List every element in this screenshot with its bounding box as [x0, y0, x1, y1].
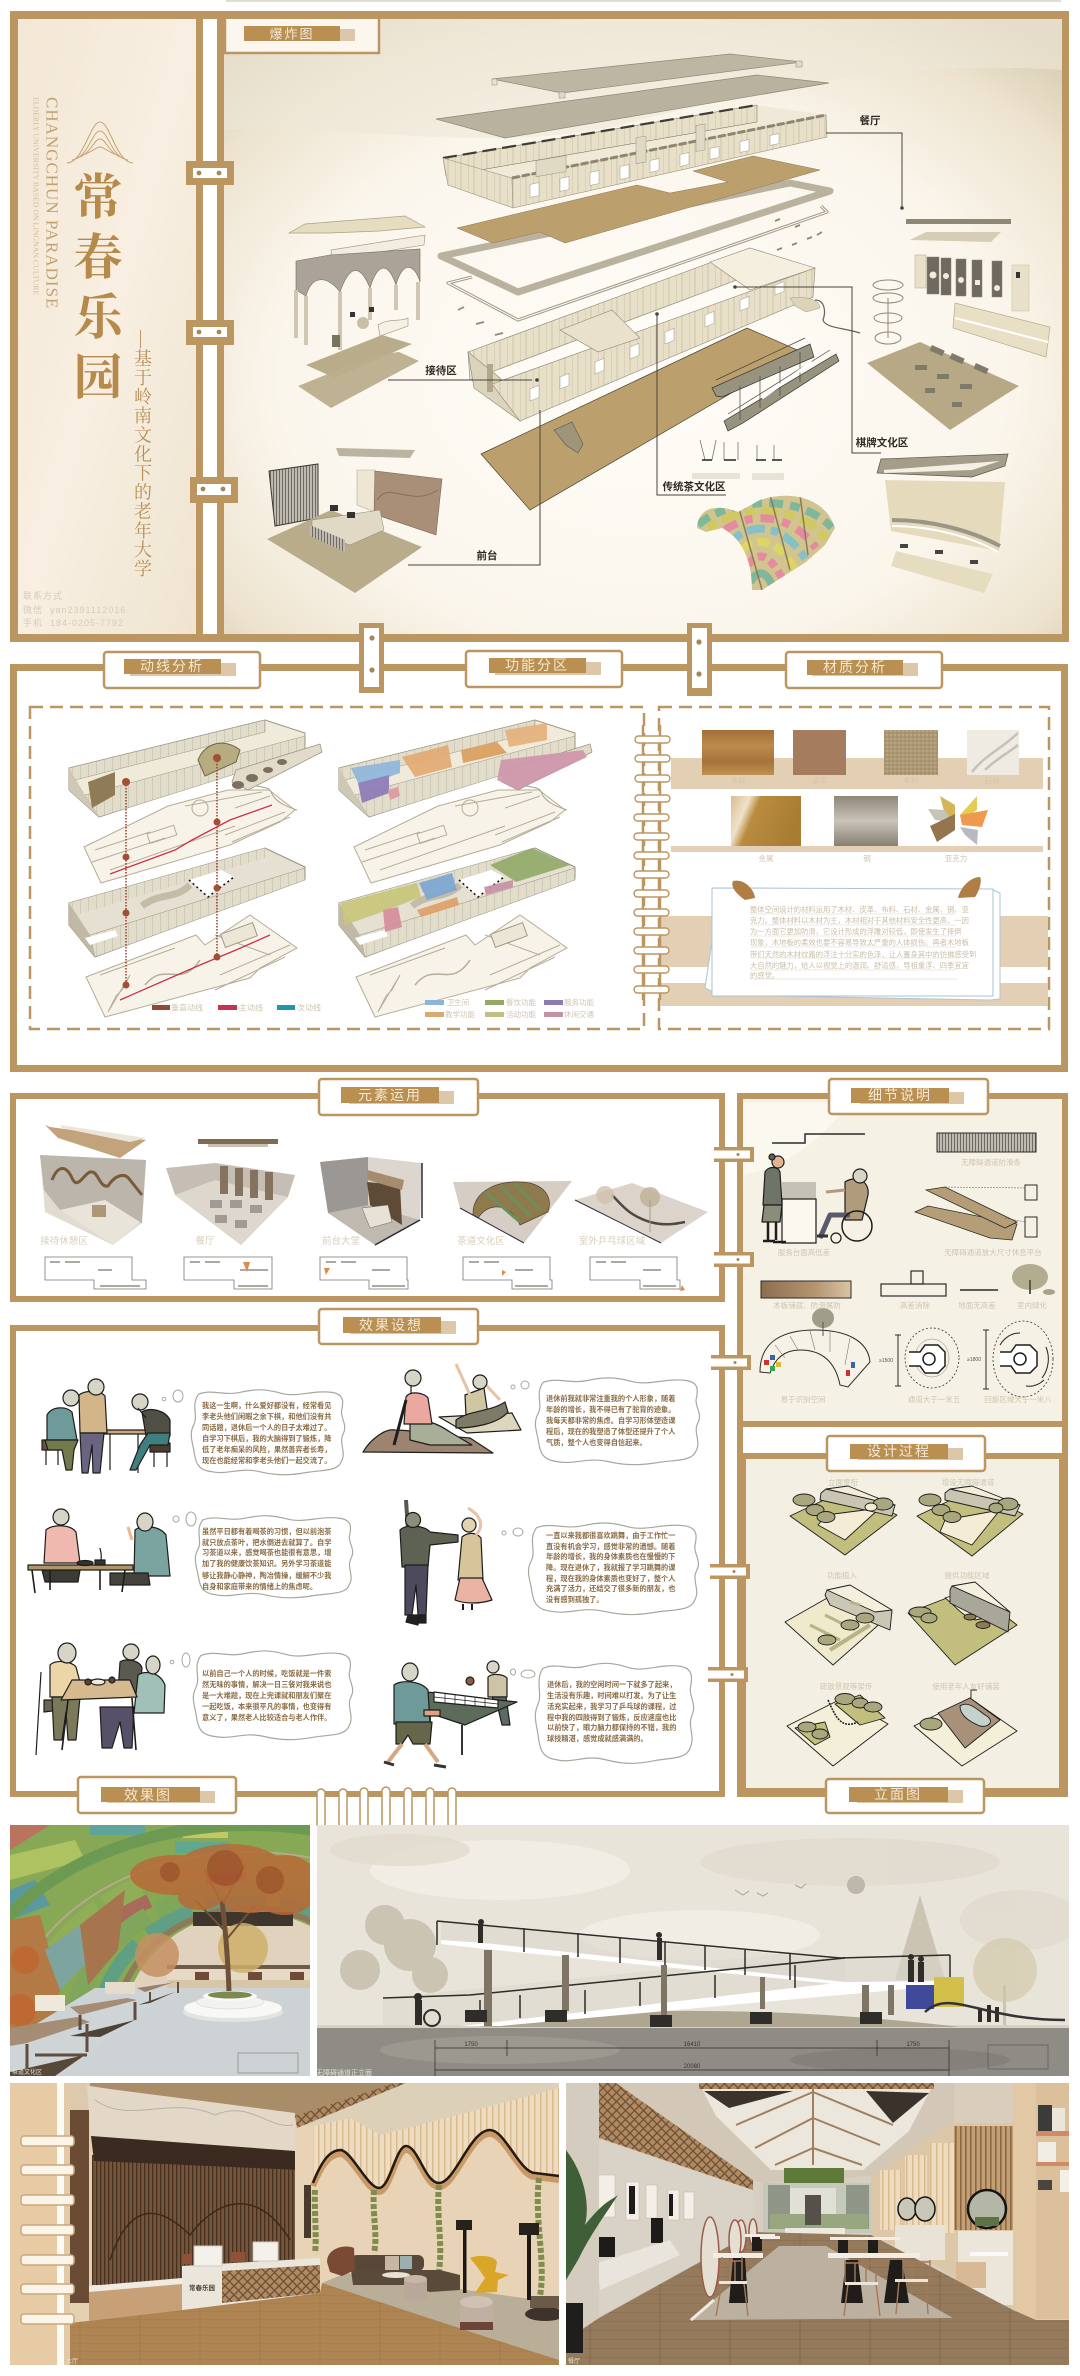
back window	[763, 2183, 871, 2233]
bubble 6: 退休后，我的空闲时间一下就多了起来，	[547, 1680, 676, 1689]
ceiling	[64, 2083, 399, 2118]
left wall	[734, 2184, 753, 2190]
floor	[566, 2232, 1069, 2365]
note paper with description: 的感觉。	[750, 971, 779, 980]
panel: exploded view and title	[10, 11, 1069, 642]
lower walls	[468, 248, 815, 421]
bubble 3: 自身和家庭带来的情绪上的焦虑呢。	[202, 1582, 317, 1591]
tab: 立面图	[826, 1779, 984, 1813]
tab: 元素运用	[319, 1079, 478, 1115]
bubble 5: 一起吃饭，本来很平凡的事情，也变得有	[202, 1702, 331, 1711]
callouts with leader lines: 传统茶文化区	[662, 480, 726, 493]
side clips joining panels	[708, 1147, 754, 1682]
soft ink wash	[224, 19, 1062, 138]
big tan floor	[481, 328, 802, 510]
bubble 4: 年龄的增长，我的身体素质也在慢慢的下	[546, 1552, 675, 1561]
callouts with leader lines	[388, 114, 909, 565]
process captions: 使用老年人友好铺装	[932, 1681, 1000, 1691]
ramps	[580, 1936, 944, 1980]
detail captions: 易于识别空间	[780, 1394, 826, 1404]
note paper with description: 为一方面它更加防滑，它设计形成的浮雕对较低，即使发生了摔倒	[750, 927, 962, 936]
background trees	[340, 1895, 1037, 2025]
render: ramp elevation: 20080	[684, 2064, 701, 2070]
material swatches: 布料	[904, 775, 919, 785]
detail: arch	[760, 1308, 870, 1387]
silhouettes	[414, 1919, 999, 2027]
room labels: 餐厅	[195, 1235, 215, 1247]
render: arch atrium	[10, 1825, 310, 2076]
note paper with description	[705, 877, 1000, 1000]
callouts with leader lines: 接待区	[425, 364, 457, 377]
arch ribs	[10, 1825, 310, 1988]
tab: 效果图: 效果图	[124, 1787, 172, 1803]
ramp	[712, 338, 839, 431]
top sliver	[226, 0, 1061, 2]
room model: tea arch	[453, 1181, 572, 1243]
panel: design process	[740, 1424, 1065, 1794]
contact details: 微信	[23, 604, 43, 615]
render: restaurant	[566, 2083, 1069, 2365]
bubble 2: 程后，现在的我塑造了体型还提升了个人	[546, 1427, 676, 1436]
floor plate tan	[457, 156, 820, 243]
mini key plans	[45, 1257, 685, 1291]
bubble 1: 低了老年痴呆的风险，果然善弈者长寿，	[202, 1445, 331, 1454]
panel: effect ideas	[13, 1328, 722, 1794]
process model 2	[917, 1486, 1023, 1556]
spine clips	[186, 161, 238, 503]
bubble 3: 加了我的健康饮茶知识。另外学习茶道能	[202, 1559, 332, 1568]
function legend: 休闲交通	[564, 1009, 594, 1019]
bubble 1: 李老头他们闲暇之余下棋，和他们没有共	[202, 1412, 331, 1421]
detail captions: 无障碍通道防滑条	[961, 1157, 1021, 1167]
module: restaurant	[867, 219, 1050, 430]
arch under band	[313, 2134, 559, 2192]
bubble 3: 够让我静心静神，陶冶情操，缓解不少我	[202, 1571, 332, 1580]
circulation legend	[152, 1002, 321, 1012]
main tree	[130, 1844, 320, 1992]
detail: tree	[1012, 1264, 1055, 1295]
circulation legend: 垂直动线	[171, 1002, 203, 1012]
lattice beam	[295, 2083, 406, 2128]
bubble 4: 没有感到孤独了。	[546, 1595, 604, 1604]
vertical pills binding	[317, 1787, 456, 1828]
detail: wood bar	[761, 1281, 851, 1298]
stairs	[554, 422, 583, 453]
panel: analysis frame	[14, 668, 1064, 1068]
ring beam	[441, 183, 830, 292]
tab: 设计过程: 设计过程	[867, 1443, 931, 1459]
detail captions: 地面无高差	[958, 1300, 996, 1310]
tab: 细节说明	[829, 1079, 988, 1114]
detail captions: 通道大于一米五	[908, 1394, 961, 1404]
tile roof	[91, 2136, 301, 2170]
room labels: 前台大堂	[322, 1235, 360, 1247]
detail: counter heights	[762, 1134, 872, 1243]
process model 5	[787, 1694, 888, 1766]
booths	[958, 2231, 1013, 2305]
process captions: 立面贯衔	[828, 1477, 858, 1487]
bubble 4: 一直以来我都很喜欢跳舞，由于工作忙一	[546, 1531, 675, 1540]
dark column	[70, 2110, 89, 2303]
function zoning axonometric	[339, 720, 592, 1017]
sofa and stools	[327, 2247, 565, 2330]
detail captions: 回旋区域大于一米八	[984, 1394, 1052, 1404]
detail: turning circle 1500	[879, 1328, 959, 1388]
bubble 3: 习茶道以来，感觉喝茶也能很有意思，增	[202, 1548, 331, 1557]
detail captions: 室内绿化	[1017, 1300, 1047, 1310]
function legend: 卫生间	[447, 997, 469, 1007]
module: chess culture area	[877, 454, 1008, 593]
process model 6	[914, 1690, 1017, 1766]
vertical circulation dotted	[122, 754, 221, 988]
render: ramp elevation: 1750	[906, 2042, 920, 2048]
room model: ping pong area	[575, 1183, 708, 1243]
vines	[315, 2178, 542, 2296]
room labels: 茶道文化区	[457, 1235, 505, 1247]
detail captions: 高差消除	[900, 1300, 930, 1310]
process captions: 增设无障碍通道	[942, 1477, 995, 1487]
tab: 功能分区: 功能分区	[505, 657, 569, 673]
wavy ground and pool	[815, 300, 860, 333]
bubble 3: 虽然平日都有着喝茶的习惯，但以前泡茶	[202, 1527, 332, 1536]
tab: 功能分区	[466, 651, 622, 687]
bubble 1: 我这一生啊，什么爱好都没有，经常看见	[202, 1401, 331, 1410]
material swatches: 金属	[758, 853, 774, 863]
vertical clips across frames	[359, 623, 712, 696]
panel: element application	[13, 1096, 722, 1299]
main circulation routes	[110, 805, 272, 1000]
material swatches: 钢	[863, 853, 871, 863]
note paper with description: 大自然的魅力，给人以视觉上的温润、舒适感，导祖重浮、四季宜宜	[750, 961, 969, 970]
note paper with description: 现象，木地板的柔效也要不容易导致太严重的人体损伤。再者木地板	[750, 938, 970, 947]
contact details: 联系方式	[23, 590, 63, 601]
dining tables and chairs	[729, 2235, 909, 2303]
module: colourful arch tea area	[690, 440, 840, 595]
detail captions	[773, 1157, 1052, 1404]
lattice strip left	[599, 2083, 753, 2190]
slat wall	[92, 2155, 297, 2285]
material swatches	[702, 730, 1019, 863]
room model: front desk	[320, 1157, 422, 1245]
module: front desk	[267, 448, 442, 593]
bubble 1: 同话题，退休后一个人的日子太难过了。	[202, 1423, 331, 1432]
bubble 5: 然无味的事情，解决一日三餐对我来说也	[202, 1680, 331, 1689]
roof plate	[492, 54, 802, 98]
render: ramp elevation: 1750	[464, 2042, 478, 2048]
callouts with leader lines: 前台	[476, 549, 498, 562]
process model 4	[908, 1582, 1017, 1665]
image captions: 茶道文化区	[12, 2068, 42, 2076]
material swatches: 皮革	[812, 775, 828, 785]
process captions: 疏散景观等架传	[820, 1681, 873, 1691]
material swatches: 石材	[984, 775, 1000, 785]
process captions	[820, 1477, 1000, 1691]
subtitle vertical: —基于岭南文化下的老年大学	[132, 329, 152, 578]
bubble 4: 充满了活力，还结交了很多新的朋友，也	[546, 1584, 675, 1593]
process captions: 功能植入	[827, 1570, 857, 1580]
reception desk: 常春乐园	[189, 2283, 216, 2292]
process model 1	[790, 1486, 897, 1555]
tab: 材质分析: 材质分析	[823, 659, 887, 675]
english title vertical	[32, 97, 62, 309]
process model 3	[785, 1585, 892, 1665]
tab: 元素运用: 元素运用	[358, 1087, 422, 1103]
bubble 4: 降。现在退休了，我就报了学习跳舞的课	[546, 1563, 676, 1572]
far left column and plant	[597, 2174, 599, 2280]
ceiling plate	[436, 75, 829, 138]
circulation analysis axonometric	[69, 720, 322, 1017]
bubble 6: 生活没有乐趣，时间难以打发。为了让生	[547, 1691, 676, 1700]
panel: detail notes	[740, 1096, 1065, 1424]
function legend	[425, 997, 594, 1019]
callouts with leader lines: 餐厅	[860, 114, 881, 127]
bubble 3: 就只放点茶叶，把水倒进去就算了。自学	[202, 1538, 331, 1547]
room labels: 室外乒乓球区域	[579, 1235, 646, 1247]
bubble 2: 我每天都非常的焦虑。自学习形体塑造课	[546, 1416, 676, 1425]
arched glass partitions	[701, 2217, 757, 2297]
tab: 材质分析	[786, 652, 942, 688]
material swatches: 亚克力	[945, 853, 967, 863]
dimension lines	[435, 2040, 949, 2076]
function legend: 教学功能	[445, 1009, 475, 1019]
bubble 5	[170, 1651, 353, 1740]
callouts with leader lines: 棋牌文化区	[856, 436, 909, 449]
render: lobby	[10, 2083, 565, 2365]
bubble 6	[510, 1663, 694, 1763]
contact details: 手机	[23, 617, 43, 628]
detail: strip bar	[937, 1133, 1036, 1152]
right wall and slats	[871, 2120, 1013, 2310]
bubble 2	[511, 1378, 700, 1465]
function legend: 餐饮功能	[506, 997, 536, 1007]
detail: turning circle 1800: ≥1800	[967, 1357, 981, 1363]
render: ramp elevation: 16410	[684, 2042, 701, 2048]
marble back wall	[87, 2086, 295, 2152]
tab: 细节说明: 细节说明	[868, 1087, 932, 1103]
detail captions: 木板铺就、防滑属防	[773, 1300, 841, 1310]
title logo: mountain lines	[67, 122, 133, 163]
scene: dance	[400, 1500, 492, 1625]
function legend: 活动功能	[506, 1009, 536, 1019]
bubble 2: 退休前我就非常注重我的个人形象，随着	[546, 1394, 675, 1403]
detail captions: 服务台面高低差	[778, 1247, 831, 1257]
left title panel background	[18, 19, 196, 634]
bubble 2: 年龄的增长，我不得已有了驼背的迹象。	[546, 1405, 675, 1414]
bubble 4: 程，现在我的身体素质也变好了，整个人	[546, 1574, 676, 1583]
material swatches: 木材	[730, 775, 746, 785]
bubble 1: 现在也能经常和李老头他们一起交流了。	[202, 1456, 331, 1465]
detail: turning circle 1500: ≥1500	[879, 1358, 893, 1364]
right wall	[295, 2151, 301, 2260]
thin ring	[448, 206, 827, 320]
contact details	[23, 590, 126, 628]
image captions: 餐厅	[568, 2357, 580, 2365]
upper walls	[443, 105, 827, 208]
tab: 立面图: 立面图	[874, 1786, 922, 1802]
bubble 2: 气质，整个人也变得自信起来。	[546, 1438, 647, 1447]
scene: table tennis	[384, 1661, 517, 1767]
small pieces	[458, 219, 822, 335]
detail captions: 无障碍通道放大尺寸休息平台	[944, 1247, 1042, 1257]
title: 常春乐园: 常	[73, 170, 123, 225]
note paper with description: 整体空间设计的材料运用了木材、皮革、布料、石材、金属、钢、亚	[750, 905, 969, 914]
room labels: 接待休憩区	[40, 1235, 88, 1247]
title: 常春乐园: 园	[73, 350, 123, 405]
contact details: yan2391112016	[50, 605, 126, 615]
function legend: 服务功能	[564, 997, 594, 1007]
ceiling	[616, 2083, 954, 2183]
bubble 5: 是一大难题，现在上完课就和朋友们聚在	[202, 1691, 331, 1700]
right exploded panel background	[224, 19, 1062, 634]
tree planter	[183, 1991, 283, 2022]
tab: 效果设想	[319, 1309, 478, 1344]
scene: dining	[36, 1643, 165, 1755]
tab: 动线分析	[104, 652, 260, 688]
detail: level change	[881, 1271, 998, 1296]
room labels	[40, 1235, 646, 1247]
bubble 1: 自学习下棋后，我的大脑得到了锻炼，降	[202, 1434, 332, 1443]
bookshelf	[1013, 2083, 1036, 2319]
circulation legend: 次动线	[297, 1002, 321, 1012]
furniture	[10, 1980, 180, 2076]
scene: tea	[28, 1509, 170, 1593]
bubble 3	[173, 1512, 353, 1598]
binding spine	[203, 19, 217, 634]
bubble 4: 直没有机会学习，感觉非常的遗憾。随着	[546, 1542, 675, 1551]
bubble 1	[162, 1390, 345, 1475]
arch detail in upper floor	[88, 743, 287, 808]
note paper with description: 克力。整体材料以木材为主，木材相对于其他材料安全性更高，一因	[750, 916, 969, 925]
contact details: 184-0205-7792	[50, 618, 124, 628]
image captions	[12, 2068, 580, 2365]
left strip and pills	[10, 2083, 57, 2365]
module: reception	[289, 216, 425, 408]
process captions: 提供功能区域	[944, 1570, 990, 1580]
bubble 5: 以前自己一个人的时候，吃饭就是一件索	[202, 1669, 331, 1678]
tab: 爆炸图	[225, 19, 379, 53]
lower left wall and plants	[10, 1915, 60, 2040]
material bands	[660, 758, 1048, 1006]
english title vertical: CHANGCHUN PARADISE	[42, 97, 62, 309]
upper right ceiling	[297, 2083, 559, 2135]
coil binding	[634, 725, 670, 1000]
title: 常春乐园: 春	[73, 230, 123, 285]
bubble 5: 意义了，果然老人比较适合与老人作伴。	[202, 1713, 331, 1722]
small trees	[135, 1933, 179, 1977]
detail: turning circle 1800	[967, 1321, 1053, 1397]
exploded building stack	[436, 54, 860, 510]
bubble 4	[502, 1523, 698, 1615]
image captions: 大厅	[66, 2357, 78, 2365]
reception desk	[89, 2242, 320, 2321]
bin	[566, 2303, 583, 2353]
tab: 效果图	[78, 1777, 236, 1813]
tab: 效果设想: 效果设想	[359, 1317, 423, 1333]
bubble 6: 活充实起来，我学习了乒乓球的课程，过	[547, 1702, 676, 1711]
bubble 6: 球技精湛，感觉成就感满满的。	[547, 1734, 648, 1743]
title: 常春乐园: 乐	[73, 290, 126, 345]
floor	[70, 2283, 559, 2365]
room model: restaurant	[166, 1139, 295, 1245]
title: 常春乐园	[73, 170, 126, 405]
english title vertical: ELDERLY UNIVERSITY BASED ON LINGNAN CULTURE	[32, 97, 40, 295]
arch colour patches	[10, 1825, 230, 1920]
render: ramp elevation: 无障碍通道正立面	[316, 2068, 372, 2077]
tab: 动线分析: 动线分析	[140, 658, 204, 674]
scene: yoga	[363, 1364, 521, 1453]
note paper with description: 带们天然的木材纹路的浮注十分实的色泽，让人置身其中的彷佛感受到	[750, 950, 976, 959]
slats above arches	[313, 2088, 559, 2188]
detail: ramp	[915, 1185, 1037, 1240]
circulation legend: 主动线	[239, 1002, 263, 1012]
bubble 6: 以前快了，眼力脑力都保持的不错，我的	[547, 1723, 676, 1732]
bubble 6: 程中我的四肢得到了锻炼，反应速度也比	[547, 1713, 676, 1722]
scene: chess	[42, 1379, 170, 1473]
tab: 爆炸图: 爆炸图	[269, 26, 315, 42]
floor lamps and sculpture	[456, 2220, 539, 2300]
room model: reception	[40, 1125, 146, 1245]
tab: 设计过程	[827, 1436, 985, 1471]
render: ramp elevation	[316, 1825, 1080, 2077]
